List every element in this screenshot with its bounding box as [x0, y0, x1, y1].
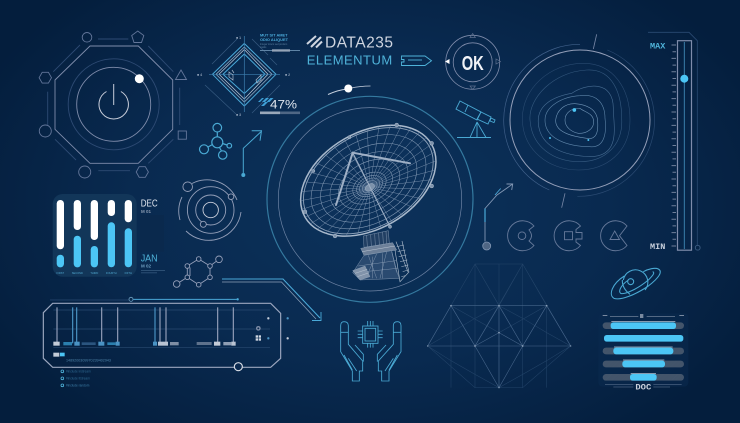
bar labels: SECOND	[72, 271, 83, 275]
bar labels: FIRST	[57, 271, 64, 275]
top slider	[328, 84, 370, 94]
gauge labels	[650, 42, 666, 252]
hexagon molecule	[173, 256, 222, 287]
diamond layers	[209, 36, 280, 112]
doc top rule	[603, 314, 684, 318]
OK button	[445, 34, 500, 90]
icon: ringed planet	[611, 268, 660, 299]
date DEC: M 01	[141, 209, 152, 214]
doc bars	[604, 322, 683, 381]
geometric hexagon lattice	[427, 264, 571, 388]
dish bowl	[281, 102, 456, 259]
chip	[358, 321, 383, 348]
dial knob	[135, 74, 144, 83]
timeline controls	[256, 317, 289, 341]
bar labels: FIFTH	[125, 271, 132, 275]
diamond axis labels: ■ 1	[236, 36, 241, 40]
long connector arrow	[222, 279, 321, 320]
diamond axis labels: ■ 2	[285, 73, 290, 77]
bar labels: THIRD	[90, 271, 98, 275]
circuit arrow left	[242, 131, 262, 176]
dish struts	[336, 153, 410, 223]
date dark block	[140, 215, 164, 252]
three notched dials	[508, 221, 627, 251]
diamond outer guides	[205, 39, 280, 114]
date JAN: JAN	[141, 254, 158, 265]
diamond caption: MUT SIT AMET	[260, 32, 288, 38]
timeline sliders	[57, 307, 233, 343]
dial rings	[504, 34, 655, 208]
dial rings	[68, 59, 159, 150]
gauge labels: MAX	[650, 42, 666, 52]
timeline markers	[53, 342, 236, 357]
bar labels	[57, 271, 132, 275]
contour lines	[522, 63, 630, 170]
power dial	[39, 31, 186, 178]
title: DATA235 ELEMENTUM	[307, 35, 393, 67]
radar diamond chart	[205, 36, 280, 114]
date DEC	[141, 199, 158, 214]
diamond caption: mattis	[260, 46, 267, 49]
octagon frame	[55, 46, 173, 163]
dish rim knobs	[303, 123, 434, 238]
47 percent stat: 47%	[270, 98, 297, 112]
doc hatched tracks	[603, 322, 684, 381]
bar labels: FOURTH	[106, 271, 117, 275]
dial: square	[554, 221, 582, 251]
right hand	[377, 322, 401, 381]
dial: triangle	[601, 221, 627, 251]
OK button: OK	[462, 53, 484, 75]
circuit arrow right	[483, 184, 513, 250]
icon: telescope	[456, 101, 495, 138]
doc label: DOC	[635, 384, 652, 393]
contour markers	[549, 108, 589, 141]
date JAN	[141, 254, 165, 273]
timeline knob	[234, 363, 242, 371]
timeline frame	[43, 303, 281, 367]
perimeter shapes	[39, 31, 186, 178]
timeline grid	[53, 310, 270, 347]
timeline legend: #include random	[66, 383, 90, 387]
gauge ticks	[672, 45, 676, 246]
dial: circle	[508, 221, 534, 251]
logo hatch	[307, 36, 322, 48]
left hand	[341, 322, 363, 381]
timeline top rule	[50, 297, 239, 301]
timeline legend: #include instream	[66, 369, 91, 373]
date JAN: M 02	[141, 264, 152, 268]
47 percent stat	[258, 98, 300, 114]
orbit diagram	[179, 180, 241, 240]
data timeline panel	[43, 297, 289, 387]
icon: molecule	[200, 123, 232, 159]
contour map dial	[504, 34, 655, 208]
timeline legend	[61, 369, 91, 387]
arrow label	[402, 56, 432, 66]
title: DATA235 ELEMENTUM: ELEMENTUM	[307, 52, 392, 67]
DOC bar panel	[598, 313, 688, 393]
date DEC: DEC	[141, 199, 158, 210]
diamond caption: ODIO ALIQUET	[260, 37, 289, 42]
dish pedestal	[353, 231, 409, 282]
panel background	[53, 194, 137, 277]
diamond axis labels	[197, 36, 290, 117]
gauge track	[648, 32, 700, 250]
central radar ring	[267, 96, 473, 302]
vertical gauge	[648, 32, 700, 252]
doc bar caps	[611, 321, 675, 374]
timeline code: 1489200309970239402943	[66, 359, 111, 363]
gauge handle	[680, 75, 688, 83]
doc panel background	[598, 313, 688, 387]
diamond caption: Integer lorem sed pretium	[260, 43, 287, 46]
diamond axis labels: ■ 3	[236, 113, 241, 117]
title: DATA235 ELEMENTUM: DATA235	[325, 35, 393, 52]
gauge labels: MIN	[650, 242, 665, 252]
connector strokes	[48, 39, 180, 171]
icon: power	[99, 84, 128, 119]
timeline legend: #include ifstream	[66, 376, 90, 380]
bars	[57, 200, 132, 267]
radio telescope dish	[281, 102, 456, 282]
calendar bar panel	[53, 194, 165, 277]
diamond axis labels: ■ 4	[197, 73, 202, 77]
icon: hands holding chip	[341, 321, 401, 381]
diamond caption	[260, 32, 300, 52]
